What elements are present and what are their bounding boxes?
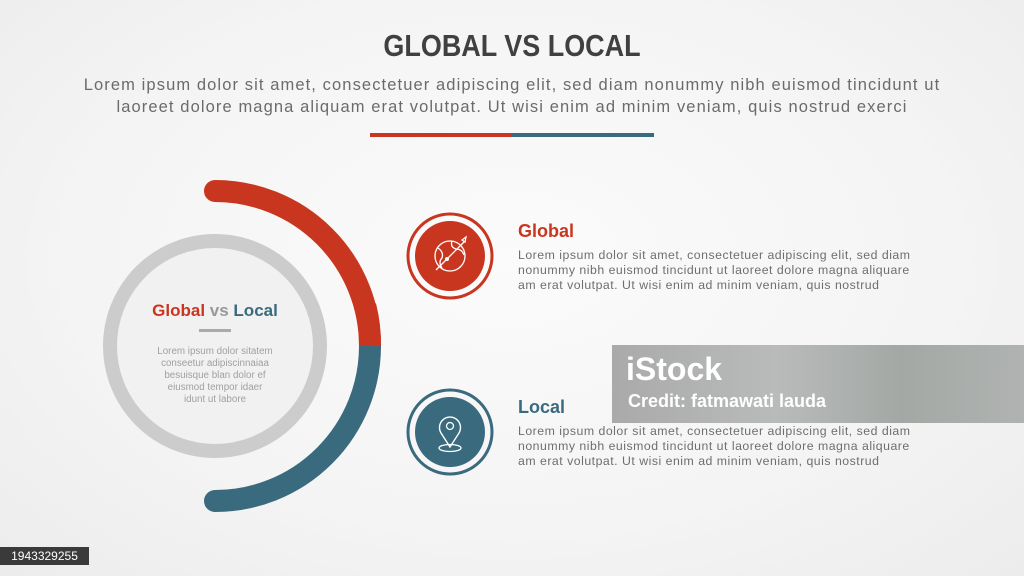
item: local [518, 397, 911, 468]
subtitle text: Lorem ipsum dolor sit amet, consectetuer adipiscing elit, sed diam nonummy nibh euismod tincidunt ut [84, 76, 940, 94]
center circle [110, 241, 320, 451]
center text: besuisque blan dolor ef [164, 370, 266, 381]
item: global: nonummy nibh euismod tincidunt ut laoreet dolore magna aliquare [518, 263, 910, 277]
id tag [0, 547, 89, 565]
arc: local half [215, 306, 370, 501]
id tag: 1943329255 [11, 549, 78, 563]
watermark banner [612, 345, 1024, 423]
center heading: Global vs Local [152, 301, 278, 320]
center text: eiusmod tempor idaer [168, 382, 263, 393]
icon: location pin [408, 390, 492, 474]
subtitle text [84, 76, 940, 116]
item: global [518, 221, 911, 292]
watermark banner: iStock [626, 351, 722, 387]
item: local: am erat volutpat. Ut wisi enim ad minim veniam, quis nostrud [518, 454, 879, 468]
item: global: Lorem ipsum dolor sit amet, consectetuer adipiscing elit, sed diam [518, 248, 911, 262]
arc: global half [215, 191, 370, 346]
item: local: nonummy nibh euismod tincidunt ut laoreet dolore magna aliquare [518, 439, 910, 453]
item: local: Local [518, 397, 565, 417]
center text: Lorem ipsum dolor sitatem [157, 346, 273, 357]
item: global: Global [518, 221, 574, 241]
title: GLOBAL VS LOCAL [383, 28, 641, 63]
item: local: Lorem ipsum dolor sit amet, consectetuer adipiscing elit, sed diam [518, 424, 911, 438]
subtitle text: laoreet dolore magna aliquam erat volutpat. Ut wisi enim ad minim veniam, quis nostrud exerci [116, 98, 908, 116]
center text: idunt ut labore [184, 394, 247, 405]
divider bar [370, 133, 654, 137]
icon: globe [408, 214, 492, 298]
watermark banner: Credit: fatmawati lauda [628, 391, 826, 411]
center text: conseetur adipiscinnaiaa [161, 358, 269, 369]
item: global: am erat volutpat. Ut wisi enim ad minim veniam, quis nostrud [518, 278, 879, 292]
